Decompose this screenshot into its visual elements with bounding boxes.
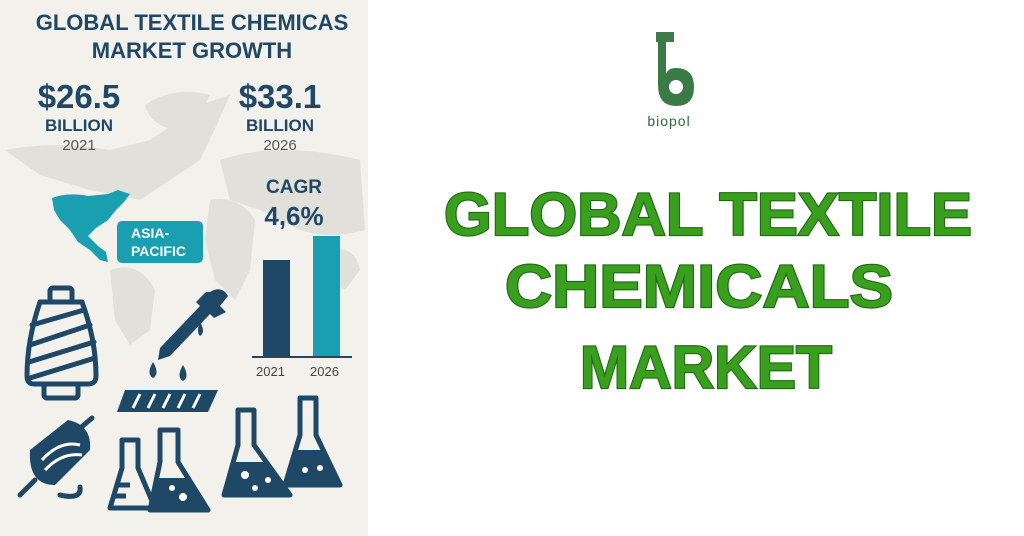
stat: CAGR [264, 177, 324, 231]
bar chart: 2026 [310, 364, 339, 379]
heading: left title [36, 10, 348, 63]
stat: 2021 value: $26.5 [38, 78, 120, 115]
yarn [20, 418, 92, 496]
bar chart: 2021 [256, 364, 285, 379]
panel: left infographic [0, 0, 368, 536]
world map background [5, 92, 365, 345]
logo: biopol: biopol [647, 113, 691, 129]
badge: asia-pacific: ASIA- [131, 225, 169, 241]
spool [50, 288, 72, 302]
logo: biopol [647, 32, 694, 129]
heading: left title: GLOBAL TEXTILE CHEMICAS [36, 10, 348, 35]
stat: CAGR: 4,6% [264, 201, 324, 231]
icon: north america map [52, 190, 130, 262]
stat: CAGR: CAGR [266, 177, 322, 198]
stat: 2026 value: $33.1 [239, 78, 321, 115]
heading: main title: MARKET [580, 334, 832, 400]
stat: 2021 value: 2021 [62, 137, 96, 154]
heading: left title: MARKET GROWTH [92, 38, 292, 63]
heading: main title: CHEMICALS [505, 253, 893, 320]
bar chart [252, 236, 352, 379]
icons: textile and chemistry [18, 286, 342, 512]
stat: 2026 value [239, 78, 321, 154]
stat: 2021 value: BILLION [45, 116, 113, 135]
stat: 2026 value: 2026 [263, 137, 297, 154]
heading: main title: GLOBAL TEXTILE [444, 181, 972, 248]
heading: main title [444, 181, 972, 400]
badge: asia-pacific: PACIFIC [131, 243, 186, 259]
stat: 2021 value [38, 78, 120, 154]
stat: 2026 value: BILLION [246, 116, 314, 135]
badge: asia-pacific [117, 221, 203, 263]
